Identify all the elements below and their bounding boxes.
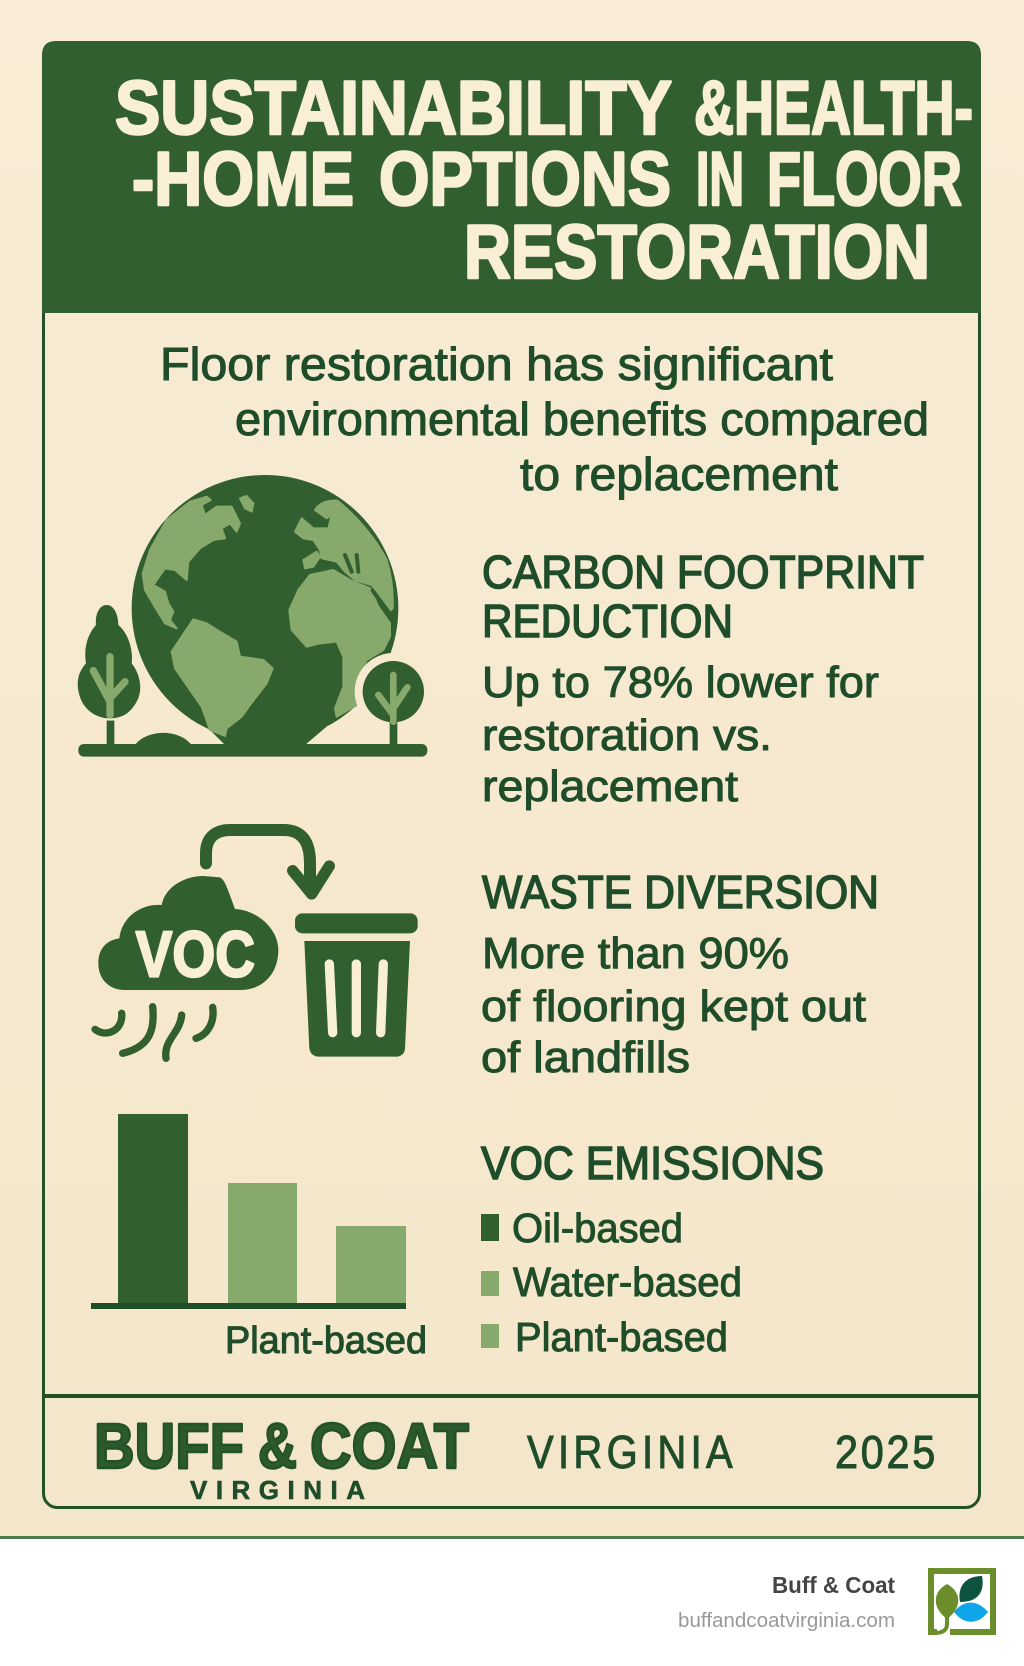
icon: globe with trees bbox=[78, 475, 432, 757]
carbon heading: REDUCTION bbox=[482, 595, 733, 647]
trash bin bbox=[295, 913, 418, 1057]
intro text: to replacement bbox=[520, 448, 838, 500]
ground joint bbox=[210, 727, 327, 745]
title: IN bbox=[696, 137, 744, 222]
waste heading: WASTE DIVERSION bbox=[482, 866, 879, 918]
oil-based bar bbox=[118, 1114, 188, 1306]
logo bbox=[931, 1571, 993, 1633]
footer brand bbox=[94, 1410, 469, 1505]
continents bbox=[143, 496, 393, 736]
globe bbox=[132, 475, 398, 742]
brand name: COAT bbox=[310, 1410, 469, 1482]
green rule bbox=[0, 1536, 1024, 1539]
axis label: Plant-based bbox=[225, 1320, 427, 1362]
carbon body: Up to 78% lower for bbox=[482, 658, 879, 707]
white attribution band bbox=[0, 1539, 1024, 1666]
water-based bar bbox=[228, 1183, 297, 1306]
attribution name: Buff & Coat bbox=[772, 1572, 895, 1598]
title: OPTIONS bbox=[379, 137, 671, 222]
carbon footprint block bbox=[482, 546, 924, 811]
brand name: & bbox=[258, 1410, 297, 1482]
hill bbox=[135, 733, 192, 745]
waste body: More than 90% bbox=[482, 929, 789, 978]
title: -HOME bbox=[132, 137, 354, 222]
legend: plant-based: Plant-based bbox=[515, 1314, 728, 1360]
footer year: 2025 bbox=[835, 1426, 938, 1478]
VOC label: VOC bbox=[136, 918, 255, 991]
carbon heading bbox=[482, 546, 924, 647]
title bbox=[115, 66, 973, 295]
waste body: of flooring kept out bbox=[481, 982, 866, 1031]
VOC emissions legend bbox=[481, 1137, 824, 1360]
header background bbox=[42, 41, 981, 313]
brand name bbox=[94, 1410, 469, 1482]
attribution url: buffandcoatvirginia.com bbox=[678, 1610, 895, 1632]
vapour wisps bbox=[95, 1007, 213, 1058]
intro text bbox=[160, 338, 929, 500]
tree halo cutouts bbox=[355, 653, 432, 730]
title: RESTORATION bbox=[464, 210, 930, 295]
intro text: environmental benefits compared bbox=[235, 393, 929, 445]
header banner bbox=[42, 41, 981, 313]
carbon body bbox=[482, 658, 879, 811]
waste body: of landfills bbox=[481, 1033, 690, 1082]
VOC cloud bbox=[98, 876, 278, 990]
inland seas bbox=[345, 555, 390, 614]
legend: water-based: Water-based bbox=[513, 1259, 742, 1305]
right tree bbox=[363, 661, 424, 745]
ground bbox=[78, 744, 427, 757]
brand subline: VIRGINIA bbox=[190, 1475, 365, 1505]
intro text: Floor restoration has significant bbox=[160, 338, 833, 390]
carbon body: replacement bbox=[482, 762, 738, 811]
carbon heading: CARBON FOOTPRINT bbox=[482, 546, 924, 598]
waste diversion block bbox=[481, 866, 879, 1082]
brand name: BUFF bbox=[94, 1410, 244, 1482]
left tree bbox=[78, 605, 140, 745]
footer location: VIRGINIA bbox=[527, 1426, 737, 1478]
curved arrow bbox=[206, 830, 329, 894]
plant-based bar bbox=[336, 1226, 406, 1306]
legend: oil-based: Oil-based bbox=[512, 1205, 683, 1251]
icon: VOC cloud, arrow and trash bin bbox=[95, 830, 418, 1058]
bar chart bbox=[91, 1114, 427, 1362]
footer divider bbox=[43, 1394, 980, 1398]
title: SUSTAINABILITY bbox=[115, 66, 672, 151]
axis bbox=[91, 1303, 406, 1309]
carbon body: restoration vs. bbox=[482, 711, 772, 760]
legend heading: VOC EMISSIONS bbox=[481, 1137, 824, 1189]
waste body bbox=[481, 929, 866, 1082]
